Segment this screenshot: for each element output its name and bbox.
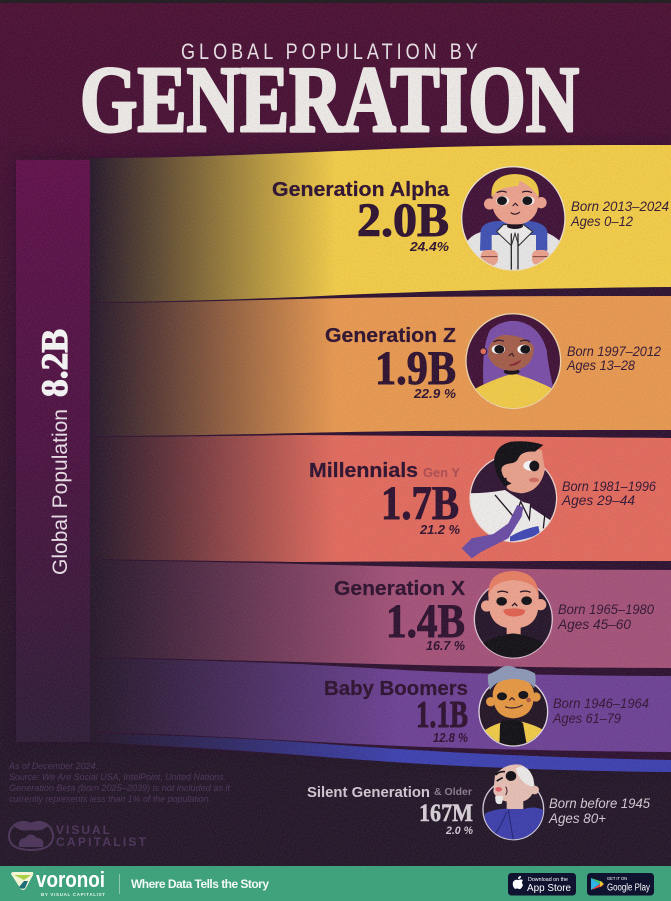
heading: Baby Boomers	[324, 678, 468, 700]
birth years and ages: Born 2013–2024	[571, 199, 669, 214]
icon: voronoi logo	[11, 872, 33, 890]
heading: Gen Y	[423, 466, 461, 480]
birth years and ages: Ages 80+	[548, 811, 606, 826]
heading: Generation X	[334, 578, 466, 600]
heading: Millennials	[309, 460, 418, 482]
band shadow	[16, 145, 671, 772]
source note: currently represents less than 1% of the population.	[9, 794, 211, 805]
heading	[309, 460, 461, 482]
voronoi wordmark: BY VISUAL CAPITALIST	[41, 892, 105, 897]
birth years and ages	[566, 344, 661, 373]
share: 21.2 %	[419, 523, 460, 537]
voronoi wordmark: voronoi	[36, 867, 105, 892]
source note: As of December 2024.	[8, 761, 98, 772]
value: 2.0B	[357, 194, 449, 247]
birth years and ages	[561, 479, 656, 508]
panel: Generation Alpha	[90, 145, 671, 302]
heading: & Older	[434, 787, 472, 798]
App Store badge	[508, 873, 576, 896]
heading: Generation Alpha	[272, 179, 450, 201]
title: GLOBAL POPULATION BY	[181, 40, 478, 64]
source note	[8, 761, 230, 805]
birth years and ages: Born 1997–2012	[567, 344, 661, 359]
value: 167M	[419, 800, 473, 827]
share: 24.4%	[409, 240, 449, 254]
icon: grandmother with grey hair	[479, 666, 548, 748]
icon: man with tie	[462, 441, 557, 558]
global population label: Global Population	[48, 409, 72, 575]
left bar: global population	[16, 160, 90, 742]
Google Play badge: GET IT ON	[607, 876, 627, 881]
birth years and ages: Born 1981–1996	[562, 479, 656, 494]
source note: Source: We Are Social USA, IntelPoint, United Nations.	[9, 772, 226, 783]
icon: bald man with moustache	[474, 571, 552, 663]
birth years and ages: Ages 61–79	[552, 711, 621, 726]
share: 12.8 %	[433, 731, 468, 745]
birth years and ages: Ages 29–44	[561, 493, 635, 508]
icon: bald elder with white beard	[483, 764, 545, 842]
birth years and ages: Born 1965–1980	[558, 602, 654, 617]
panel: Silent Generation	[90, 733, 671, 842]
panel: Generation X	[90, 560, 671, 668]
panel: Generation Z	[90, 296, 671, 436]
value: 1.1B	[416, 694, 468, 736]
heading: Generation Z	[325, 325, 456, 347]
Visual Capitalist logo: CAPITALIST	[56, 835, 147, 849]
global population value: 8.2B	[35, 329, 76, 397]
birth years and ages: Born 1946–1964	[553, 696, 649, 711]
App Store badge: App Store	[527, 882, 571, 894]
source note: Generation Beta (born 2025–2039) is not included as it	[9, 783, 230, 794]
Visual Capitalist logo: VISUAL	[56, 823, 110, 837]
birth years and ages	[552, 696, 649, 726]
share: 2.0 %	[445, 825, 473, 837]
icon: girl with purple hair	[466, 314, 561, 413]
value: 1.7B	[381, 477, 459, 530]
panel: Baby Boomers	[90, 658, 671, 752]
birth years and ages	[557, 602, 654, 632]
Visual Capitalist logo	[9, 821, 147, 850]
share: 22.9 %	[413, 387, 456, 401]
value: 1.4B	[386, 595, 465, 648]
birth years and ages	[570, 199, 669, 229]
Google Play badge: Google Play	[607, 882, 650, 894]
birth years and ages: Ages 13–28	[566, 358, 635, 373]
footer bar	[0, 866, 671, 901]
birth years and ages: Ages 45–60	[557, 617, 631, 632]
heading: Silent Generation	[307, 785, 430, 801]
tagline: Where Data Tells the Story	[131, 877, 269, 891]
App Store badge: Download on the	[528, 877, 568, 883]
Google Play badge	[587, 873, 654, 896]
birth years and ages: Born before 1945	[549, 796, 650, 811]
birth years and ages	[548, 796, 650, 826]
value: 1.9B	[375, 342, 456, 395]
birth years and ages: Ages 0–12	[570, 214, 633, 229]
share: 16.7 %	[426, 639, 465, 653]
icon: child with backpack	[460, 167, 567, 273]
panel: Millennials	[90, 435, 671, 562]
